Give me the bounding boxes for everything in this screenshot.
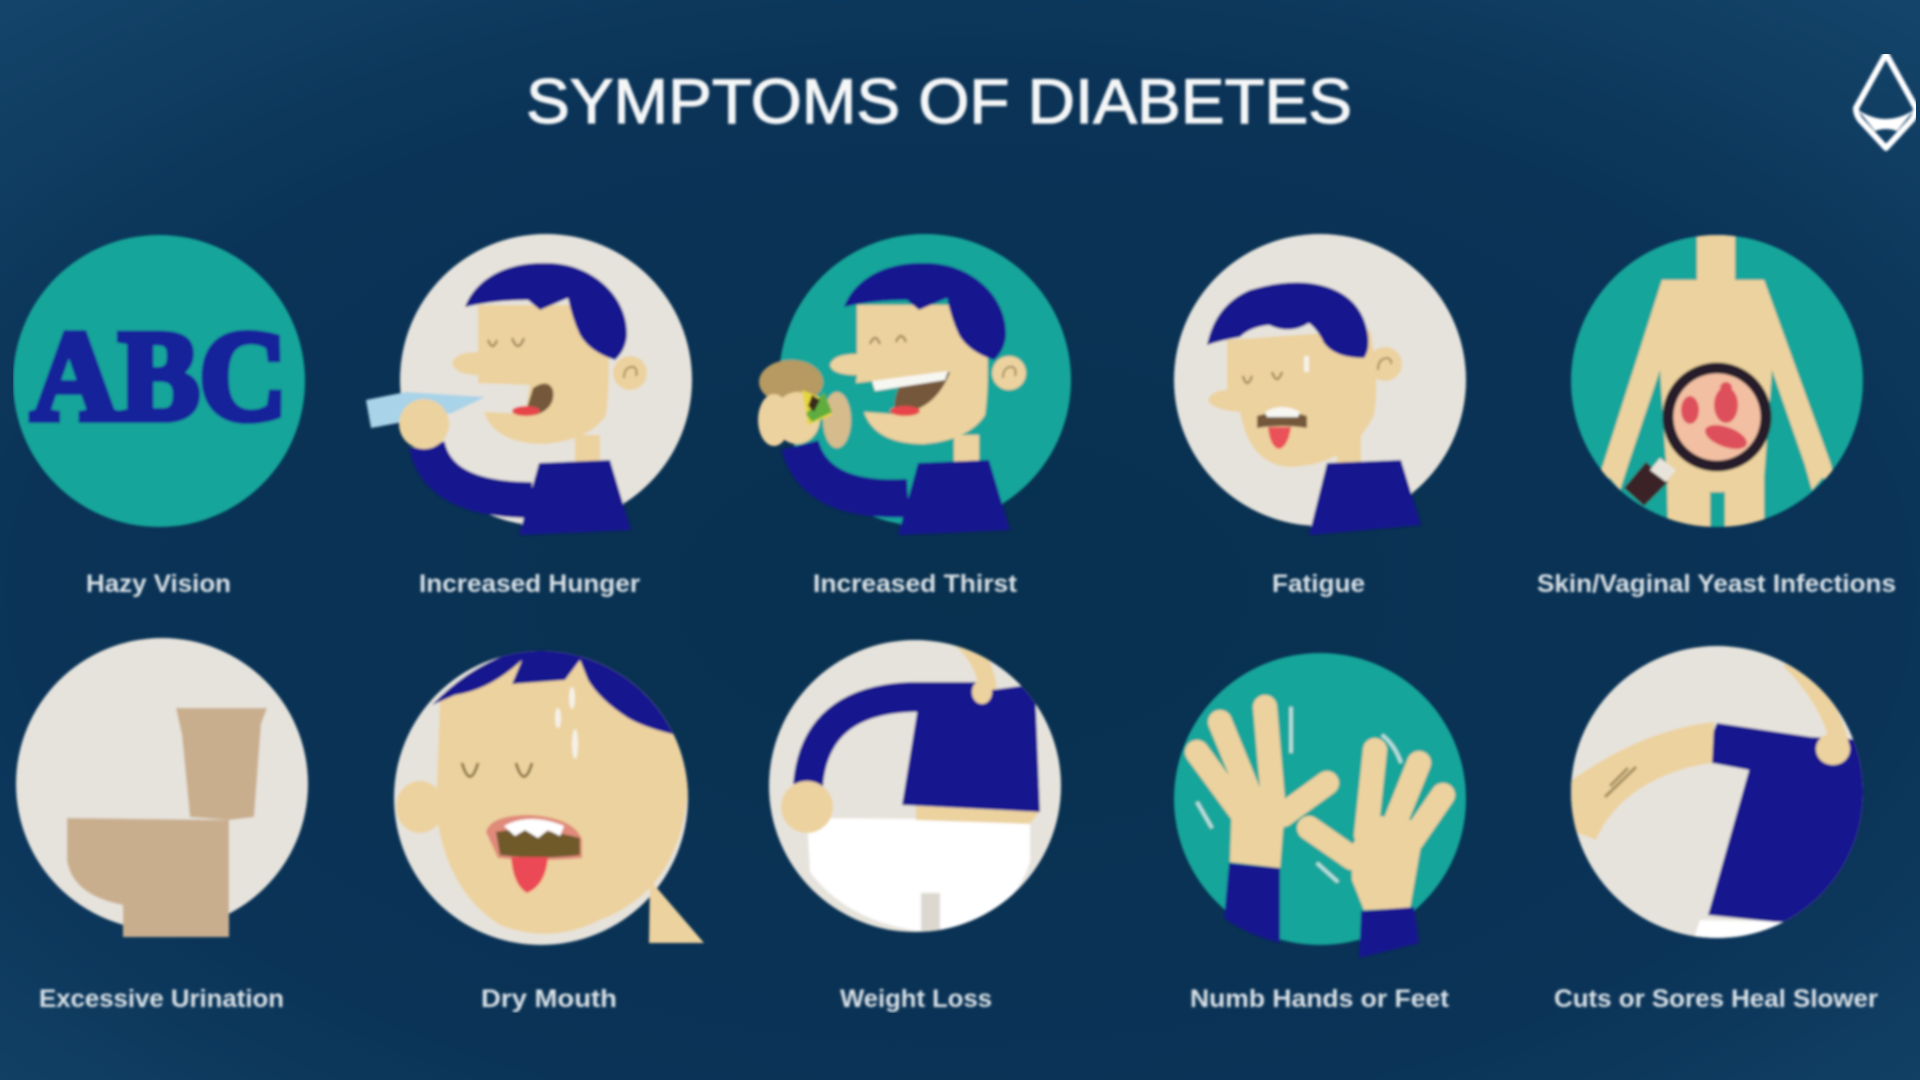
hand (781, 781, 833, 833)
white pants (1694, 919, 1784, 939)
ear (992, 356, 1026, 390)
hair (844, 263, 1006, 360)
arm (1565, 722, 1714, 840)
label: Increased Thirst (813, 570, 1018, 598)
panel: skin yeast infections (1537, 230, 1896, 598)
hand (399, 399, 449, 449)
left sleeve (1224, 863, 1280, 943)
circle (394, 651, 688, 945)
ear (613, 356, 647, 390)
upper hand (972, 680, 992, 704)
label: Hazy Vision (86, 570, 231, 598)
circle (779, 234, 1071, 526)
mouth (1257, 412, 1307, 428)
circle (769, 640, 1061, 932)
label: Increased Hunger (419, 570, 640, 598)
bowl (67, 818, 229, 937)
eyes (488, 338, 524, 346)
label: Fatigue (1272, 570, 1365, 598)
eyes (1243, 372, 1282, 383)
hand (1816, 733, 1850, 765)
face (452, 305, 609, 444)
toilet (67, 708, 267, 937)
neck (575, 435, 600, 465)
circle (1174, 653, 1466, 945)
panel: dry mouth (394, 650, 704, 1013)
hair (465, 263, 627, 360)
shirt (898, 460, 1010, 535)
mouth (525, 383, 553, 415)
sweat drops (555, 687, 578, 759)
mouth (894, 372, 950, 414)
rash (1681, 382, 1750, 454)
arm (808, 697, 985, 785)
shirt (1309, 460, 1421, 535)
hair (432, 650, 676, 735)
icon: logo (1856, 54, 1916, 148)
ear (396, 781, 444, 833)
panel: numb hands (1174, 653, 1466, 1013)
circle (1174, 234, 1466, 526)
ear curl (624, 367, 637, 378)
shirt (1708, 723, 1870, 925)
label: Dry Mouth (481, 985, 617, 1013)
circle (400, 234, 692, 526)
label: Skin/Vaginal Yeast Infections (1537, 570, 1896, 598)
eyes (870, 336, 906, 344)
label: Numb Hands or Feet (1190, 985, 1450, 1013)
mouth (486, 815, 582, 860)
neck (1337, 435, 1361, 465)
face (830, 305, 988, 444)
magnifier (1624, 368, 1766, 506)
circle (1571, 235, 1863, 527)
label: Cuts or Sores Heal Slower (1554, 985, 1878, 1013)
glass (366, 392, 485, 428)
right hand (1309, 750, 1443, 958)
label: Excessive Urination (39, 985, 284, 1013)
tongue (512, 406, 540, 416)
left hand (1197, 707, 1327, 943)
raised arm (1790, 660, 1840, 745)
circle (1571, 646, 1863, 938)
panel: fatigue (1174, 234, 1466, 598)
face (1208, 330, 1376, 467)
neck (954, 435, 979, 465)
lens (1668, 368, 1766, 466)
arm (427, 445, 532, 500)
cut (1605, 767, 1636, 797)
panel: increased thirst (758, 234, 1071, 598)
panel: excessive urination (16, 638, 308, 1013)
title: SYMPTOMS OF DIABETES (526, 67, 1352, 137)
raised arm (962, 640, 988, 690)
waist skin (916, 806, 1039, 824)
teeth (872, 371, 948, 391)
tongue (890, 406, 920, 416)
tongue (511, 857, 548, 893)
panel: weight loss (769, 640, 1061, 1013)
arm (800, 445, 908, 498)
right sleeve (1359, 907, 1419, 958)
label: Weight Loss (840, 985, 992, 1013)
face (436, 655, 688, 934)
crotch line (921, 893, 940, 933)
ear curl (1378, 358, 1391, 370)
shirt (519, 460, 631, 535)
circle (16, 638, 308, 930)
handle (1624, 462, 1668, 506)
pants (807, 818, 1030, 932)
ear curl (1003, 367, 1016, 378)
ABC letters: ABC (31, 305, 287, 447)
burger (758, 360, 851, 448)
ear (1368, 347, 1402, 381)
panel: increased hunger (366, 234, 692, 598)
body (1598, 230, 1835, 530)
hair (1207, 282, 1368, 358)
teeth (1265, 407, 1300, 417)
sweat drop (1304, 356, 1309, 372)
circle (13, 235, 305, 527)
panel: cuts heal slower (1554, 646, 1878, 1013)
neck (649, 880, 704, 943)
tank (176, 708, 267, 820)
panel: hazy vision (13, 235, 305, 598)
eyes (462, 763, 532, 776)
shirt (902, 684, 1040, 812)
numbness marks (1197, 707, 1401, 882)
tongue (1268, 427, 1291, 449)
